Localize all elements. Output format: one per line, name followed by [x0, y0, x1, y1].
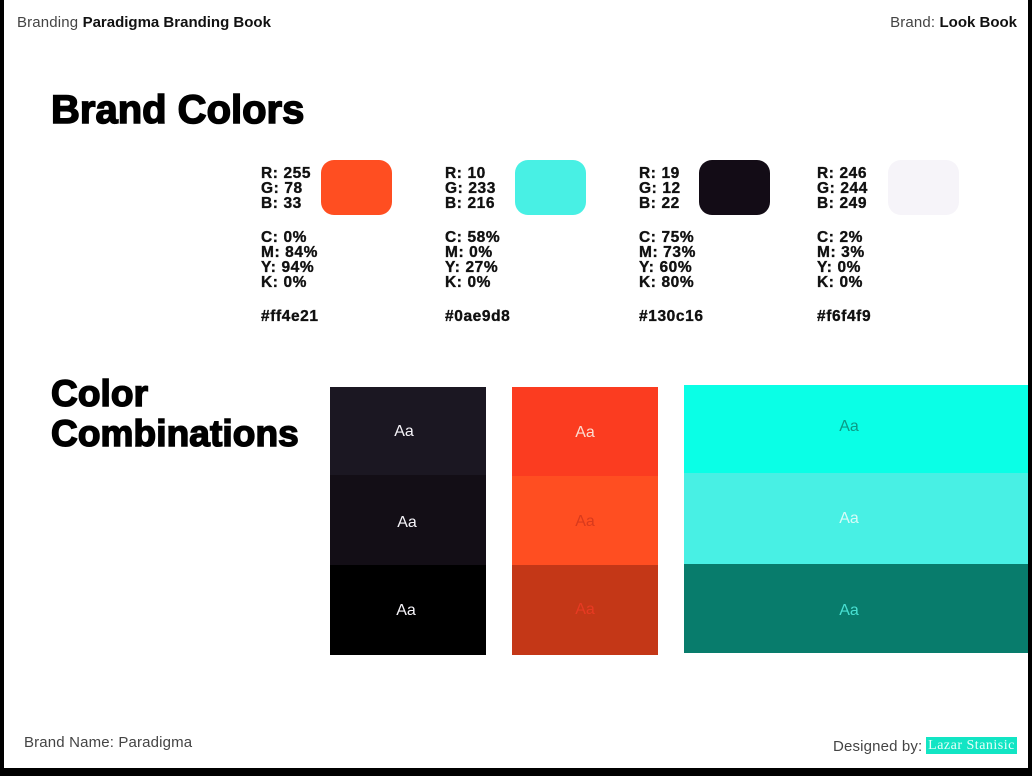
- header right: Brand: Look Book: [890, 14, 1017, 31]
- hex value: #f6f4f9: [817, 308, 871, 325]
- CMYK values: C: 2%: [817, 229, 863, 246]
- swatch: off-white: [888, 160, 959, 215]
- dark tone 3: [330, 565, 486, 655]
- CMYK values: M: 0%: [445, 244, 493, 261]
- orange tone 2: [512, 476, 658, 565]
- RGB values: G: 12: [639, 180, 681, 197]
- hex value: #0ae9d8: [445, 308, 510, 325]
- dark tone 2: [330, 475, 486, 565]
- swatch: turquoise: [515, 160, 586, 215]
- sample text 2: Aa: [575, 513, 595, 530]
- panel: turquoise color combination: [684, 385, 1028, 653]
- footer: designer credit: [833, 737, 1017, 755]
- CMYK values: K: 80%: [639, 274, 694, 291]
- panel: orange color combination: [512, 387, 658, 655]
- header left: Branding Paradigma Branding Book: [17, 14, 271, 31]
- RGB values: G: 244: [817, 180, 868, 197]
- turquoise tone 3: [684, 564, 1028, 653]
- RGB values: [261, 165, 311, 212]
- CMYK values: [445, 229, 500, 291]
- page frame: left edge: [0, 0, 4, 776]
- RGB values: G: 233: [445, 180, 496, 197]
- turquoise tone 1: [684, 385, 1028, 473]
- sample text 2: Aa: [397, 514, 417, 531]
- heading: Color Combinations: Color: [51, 373, 148, 414]
- RGB values: R: 19: [639, 165, 680, 182]
- RGB values: R: 255: [261, 165, 311, 182]
- RGB values: B: 249: [817, 195, 867, 212]
- RGB values: G: 78: [261, 180, 303, 197]
- dark tone 1: [330, 387, 486, 475]
- RGB values: [639, 165, 681, 212]
- CMYK values: M: 73%: [639, 244, 696, 261]
- RGB values: R: 246: [817, 165, 867, 182]
- CMYK values: C: 58%: [445, 229, 500, 246]
- sample text 2: Aa: [839, 510, 859, 527]
- designer name highlight: Lazar Stanisic: [928, 738, 1015, 753]
- page frame: right edge: [1028, 0, 1032, 776]
- panel: dark color combination: [330, 387, 486, 655]
- sample text 3: Aa: [396, 602, 416, 619]
- turquoise tone 2: [684, 473, 1028, 564]
- CMYK values: Y: 0%: [817, 259, 861, 276]
- orange tone 3: [512, 565, 658, 655]
- sample text 1: Aa: [575, 424, 595, 441]
- hex value: #ff4e21: [261, 308, 319, 325]
- title: Brand Colors: Brand Colors: [51, 88, 304, 132]
- panel: orange color spec: [261, 160, 392, 325]
- CMYK values: M: 3%: [817, 244, 865, 261]
- panel: off-white color spec: [817, 160, 959, 325]
- CMYK values: Y: 94%: [261, 259, 314, 276]
- CMYK values: K: 0%: [445, 274, 491, 291]
- CMYK values: K: 0%: [261, 274, 307, 291]
- RGB values: [445, 165, 496, 212]
- swatch: orange: [321, 160, 392, 215]
- RGB values: B: 33: [261, 195, 302, 212]
- hex value: #130c16: [639, 308, 704, 325]
- RGB values: R: 10: [445, 165, 486, 182]
- sample text 3: Aa: [839, 602, 859, 619]
- RGB values: B: 22: [639, 195, 680, 212]
- heading: Color Combinations: Combinations: [51, 413, 299, 454]
- CMYK values: [261, 229, 318, 291]
- CMYK values: [817, 229, 865, 291]
- RGB values: [817, 165, 868, 212]
- footer: brand name: Brand Name: Paradigma: [24, 734, 192, 751]
- sample text 3: Aa: [575, 601, 595, 618]
- swatch: near-black: [699, 160, 770, 215]
- CMYK values: K: 0%: [817, 274, 863, 291]
- heading: Color Combinations: [51, 373, 299, 454]
- sample text 1: Aa: [394, 423, 414, 440]
- RGB values: B: 216: [445, 195, 495, 212]
- CMYK values: Y: 27%: [445, 259, 498, 276]
- sample text 1: Aa: [839, 418, 859, 435]
- page frame: bottom edge: [0, 768, 1032, 776]
- CMYK values: M: 84%: [261, 244, 318, 261]
- CMYK values: Y: 60%: [639, 259, 692, 276]
- panel: turquoise color spec: [445, 160, 586, 325]
- CMYK values: C: 0%: [261, 229, 307, 246]
- orange tone 1: [512, 387, 658, 476]
- CMYK values: [639, 229, 696, 291]
- designed by label: Designed by:: [833, 738, 922, 755]
- panel: near-black color spec: [639, 160, 770, 325]
- CMYK values: C: 75%: [639, 229, 694, 246]
